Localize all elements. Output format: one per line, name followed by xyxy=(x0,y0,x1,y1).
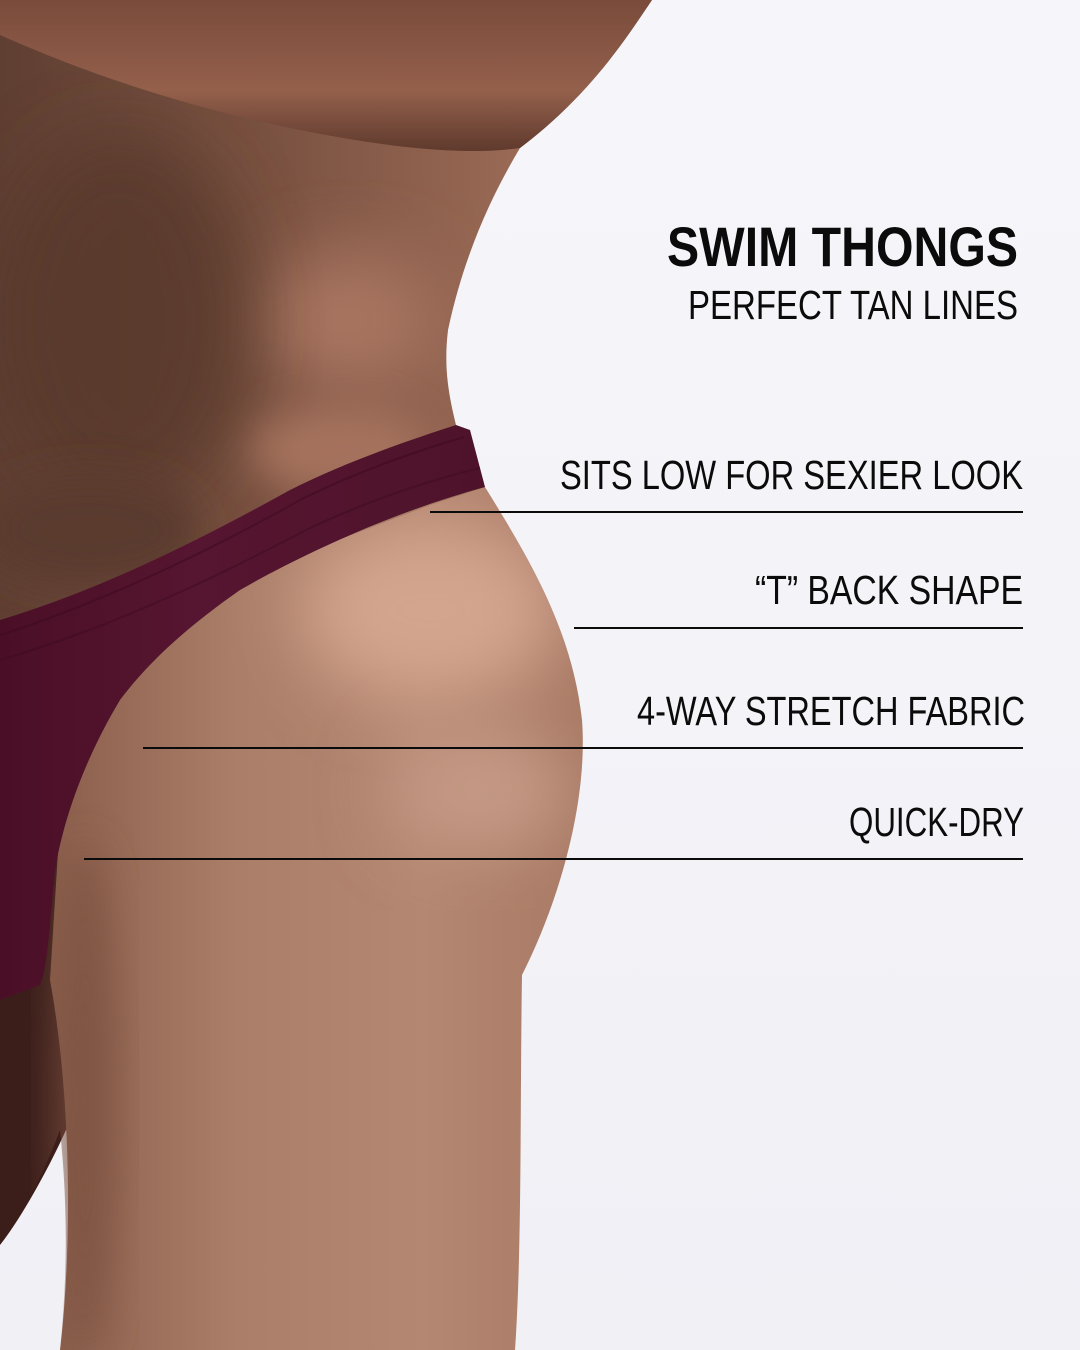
feature: quick-dry: QUICK-DRY xyxy=(849,799,1024,845)
body: hip and thigh xyxy=(50,487,583,1350)
shading and highlights xyxy=(0,130,570,1350)
body: raised arm xyxy=(0,0,652,151)
body: shaded back leg xyxy=(0,840,75,1245)
feature: T back shape: “T” BACK SHAPE xyxy=(755,567,1023,613)
swimwear: front panel and waistband xyxy=(0,425,485,1000)
title: SWIM THONGS xyxy=(667,215,1018,278)
figure: model body and swimwear xyxy=(0,0,652,1350)
body: torso xyxy=(0,0,652,720)
